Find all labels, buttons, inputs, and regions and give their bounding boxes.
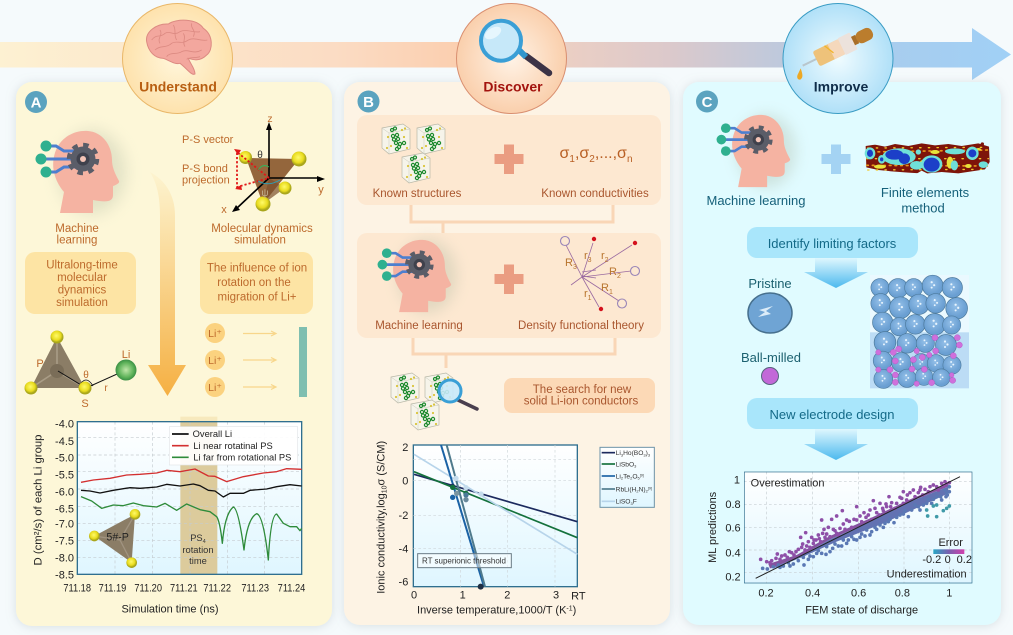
chart: diffusion coefficient vs time (32, 417, 305, 615)
callout: search: solid Li-ion conductors (524, 396, 638, 408)
density functional diagram: r (584, 288, 588, 300)
legend: LiSbO (616, 461, 634, 468)
chart: diffusion coefficient vs time: -6.0 (55, 486, 74, 498)
chart: diffusion coefficient vs time: -8.0 (55, 552, 74, 564)
icon: machine learning head (378, 239, 457, 313)
chart: ML predictions vs FEM: 0.2 (725, 572, 741, 584)
chart: ML predictions vs FEM: 0.8 (725, 499, 741, 511)
legend: 5 (638, 476, 641, 481)
chart: diffusion coefficient vs time: 711.21 (170, 582, 198, 594)
tetrahedron with Li: P (36, 358, 44, 370)
chart: diffusion coefficient vs time: -8.5 (55, 570, 74, 582)
icon: machine learning head (36, 130, 126, 214)
legend: RbLi(H (616, 486, 636, 493)
chart: ML predictions vs FEM: Underestimation (887, 568, 967, 580)
chart: diffusion coefficient vs time: Simulation time (ns) (121, 603, 219, 615)
density functional diagram: r (601, 250, 605, 262)
sigma series: n (627, 154, 632, 165)
label: RT superionic threshold: RT superionic threshold (422, 556, 506, 565)
label: known conductivities: Known conductivities (541, 188, 649, 200)
callout: ion rotation: migration of Li+ (218, 292, 297, 304)
legend: [9] (640, 473, 644, 477)
legend (600, 447, 654, 507)
sigma series: ,σ (575, 145, 589, 162)
chart: ionic conductivity: 10 (382, 485, 389, 493)
sigma series: 1 (569, 154, 575, 165)
chart: ML predictions vs FEM: FEM state of discharge (805, 604, 918, 616)
legend: Li (616, 473, 621, 480)
chart: ML predictions vs FEM: 1 (734, 474, 740, 486)
ball-milled particle (762, 368, 778, 384)
chart: ML predictions vs FEM: ML predictions (707, 491, 719, 563)
chart: diffusion coefficient vs time: 711.22 (203, 582, 231, 594)
arrow: down (804, 258, 868, 288)
label: machine learning: Machine learning (706, 193, 806, 208)
error colour bar (933, 549, 964, 554)
chart: diffusion coefficient vs time: -7.5 (55, 536, 74, 548)
chart: ionic conductivity: Ionic conductivity,log (376, 493, 388, 594)
label: machine learning: Machine (55, 223, 99, 235)
finite elements heat map (865, 142, 990, 175)
label: machine learning: Machine learning (375, 320, 463, 332)
panel A background (16, 82, 332, 626)
connector lines (411, 205, 615, 368)
label: pristine: Pristine (748, 276, 792, 291)
label: RT superionic threshold (418, 554, 511, 568)
tetrahedron with Li (24, 330, 136, 410)
legend: Li near rotatinal PS (193, 441, 273, 451)
header badge: improve: Improve (814, 78, 868, 94)
legend: 2 (646, 489, 649, 494)
chart: diffusion coefficient vs time: -5.0 (55, 453, 74, 465)
badge C: C (702, 94, 713, 111)
icon: magnifier (481, 21, 549, 73)
chart: diffusion coefficient vs time: -7.0 (55, 519, 74, 531)
callout: ultralong-time (25, 252, 136, 314)
badge C (696, 90, 718, 112)
chart: diffusion coefficient vs time: -6.5 (55, 503, 74, 515)
chart: diffusion coefficient vs time: -4.0 (55, 419, 74, 431)
md axes diagram (182, 113, 325, 216)
chart: ML predictions vs FEM: Overestimation (751, 478, 825, 490)
chart: ML predictions vs FEM: 0.6 (725, 522, 741, 534)
chart: ionic conductivity: -4 (399, 543, 408, 555)
plus sign (494, 144, 524, 174)
label: PS4 rotation time: PS (190, 533, 206, 545)
chart: ionic conductivity: 2 (402, 442, 408, 454)
label: molecular dynamics simulation: Molecular dynamics (211, 223, 313, 235)
tetrahedron with Li: r (104, 383, 108, 394)
legend: 3 (634, 464, 637, 469)
label: machine learning: learning (57, 234, 97, 246)
chart: ionic conductivity (376, 441, 654, 617)
callout: ultralong-time: Ultralong-time (46, 260, 118, 272)
md axes diagram: θ (257, 150, 263, 161)
inset tetrahedron (89, 509, 140, 568)
progress arrow (0, 28, 1011, 80)
header badge: understand: Understand (139, 78, 217, 94)
icon: machine learning head (717, 114, 796, 188)
panel C: improve (683, 82, 1001, 625)
down arrow (148, 172, 186, 396)
chart: ML predictions vs FEM (707, 472, 972, 616)
chart: diffusion coefficient vs time: 711.18 (63, 582, 91, 594)
chart: ML predictions vs FEM: 0.2 (758, 587, 774, 599)
callout: ultralong-time: simulation (56, 297, 108, 309)
header badge: discover: Discover (483, 78, 543, 94)
callout: ultralong-time: molecular (57, 272, 107, 284)
callout: ion rotation (200, 252, 313, 314)
chart: ML predictions vs FEM: 1 (946, 587, 952, 599)
density functional diagram: r (584, 250, 588, 262)
md axes diagram: projection (182, 174, 230, 186)
arrow: down (804, 429, 868, 460)
legend: [9] (648, 486, 652, 490)
md axes diagram: P-S bond (182, 163, 228, 175)
sub-panel: known data (357, 115, 661, 205)
sigma series: ,...,σ (595, 145, 627, 162)
density functional diagram: 2 (617, 273, 621, 280)
chart: ionic conductivity: -6 (399, 577, 408, 589)
md axes diagram: y (318, 184, 324, 196)
chart: ionic conductivity: RT (571, 590, 586, 602)
chart: ionic conductivity: -2 (399, 510, 408, 522)
header badge: discover (456, 4, 566, 114)
label: finite elements method: method (901, 200, 945, 216)
badge A (25, 91, 47, 113)
chart: ionic conductivity: Inverse temperature,1000/T (K (417, 605, 566, 617)
density functional diagram (560, 236, 640, 311)
tetrahedron with Li: θ (83, 370, 89, 381)
legend: 3 (643, 452, 646, 457)
md axes diagram: ψ (261, 188, 269, 199)
sigma series: 2 (589, 154, 595, 165)
header badge: understand (122, 4, 232, 114)
legend: 3 (630, 501, 633, 506)
label: molecular dynamics simulation: simulation (234, 234, 286, 246)
density functional diagram: 1 (588, 295, 592, 302)
callout: search (504, 378, 655, 413)
chart: diffusion coefficient vs time: -4.5 (55, 436, 74, 448)
panel B: discover (344, 82, 670, 625)
density functional diagram: 2 (605, 257, 609, 264)
legend: 2 (621, 476, 624, 481)
button: identify limiting factors (747, 227, 918, 258)
Li+ migration: Li⁺ (208, 355, 222, 367)
legend: LiSO (616, 499, 630, 506)
label: known structures: Known structures (373, 188, 462, 200)
chart: diffusion coefficient vs time: 711.24 (278, 582, 305, 594)
chart: ML predictions vs FEM: 0.6 (851, 587, 866, 599)
chart: ionic conductivity: -1 (566, 605, 573, 612)
callout: ultralong-time: dynamics (58, 285, 107, 297)
chart: ionic conductivity: 0 (411, 589, 417, 601)
legend: Overall Li (193, 429, 232, 439)
chart: ionic conductivity: 0 (402, 475, 408, 487)
legend: O (632, 473, 638, 480)
callout: ion rotation: rotation on the (217, 277, 291, 289)
chart: ionic conductivity: ) (573, 605, 576, 617)
chart: ML predictions vs FEM: 0 (945, 554, 951, 566)
chart: diffusion coefficient vs time: 711.20 (134, 582, 162, 594)
density functional diagram: R (609, 266, 617, 278)
icon: dropper (797, 23, 876, 80)
panel C background (683, 82, 1001, 625)
panel B background (344, 82, 670, 625)
label: PS4 rotation time: rotation (182, 545, 214, 555)
md axes diagram: x (221, 204, 227, 216)
chart: ML predictions vs FEM: -0.2 (922, 554, 941, 566)
legend: F (633, 499, 637, 506)
icon: known crystal structures (382, 124, 445, 183)
legend: 3 (648, 452, 651, 457)
callout: search: The search for new (533, 384, 632, 396)
button: new electrode design (747, 398, 918, 429)
chart: ionic conductivity: 3 (553, 589, 559, 601)
chart: ML predictions vs FEM: 0.4 (725, 547, 741, 559)
chart: diffusion coefficient vs time: -5.5 (55, 470, 74, 482)
density functional diagram: 3 (588, 257, 592, 264)
Li+ migration: Li⁺ (208, 328, 222, 340)
chart: ML predictions vs FEM: Error (938, 537, 963, 549)
label: PS4 rotation time: 4 (203, 539, 206, 545)
legend: Li far from rotational PS (193, 453, 291, 463)
Li+ migration: Li⁺ (208, 382, 222, 394)
label: ball-milled: Ball-milled (741, 350, 801, 365)
tetrahedron with Li: S (81, 398, 89, 410)
pristine particle (748, 293, 792, 333)
density functional diagram: 1 (609, 289, 613, 296)
panel A: understand (16, 82, 332, 626)
inset tetrahedron: 5#-P (106, 532, 129, 544)
button: new electrode design: New electrode design (769, 407, 895, 422)
legend: Li (616, 450, 621, 457)
chart: ionic conductivity: 2 (504, 589, 510, 601)
legend: N) (639, 486, 646, 493)
label: PS4 rotation time: time (189, 556, 207, 566)
density functional diagram: R (565, 257, 573, 269)
callout: ion rotation: The influence of ion (207, 262, 307, 274)
chart: ML predictions vs FEM: 0.4 (805, 587, 820, 599)
legend (169, 427, 298, 465)
header badge: improve (783, 4, 893, 114)
legend: Ho(BO (623, 450, 643, 457)
label: finite elements method: Finite elements (881, 185, 970, 200)
chart: diffusion coefficient vs time: 711.19 (99, 582, 126, 594)
legend: 2 (630, 476, 633, 481)
electrode particles (870, 275, 969, 388)
density functional diagram: 3 (573, 264, 577, 271)
chart: ML predictions vs FEM: 0.2 (957, 554, 972, 566)
sigma series: σ (560, 145, 569, 162)
legend: Te (623, 473, 630, 480)
density functional diagram: R (601, 282, 609, 294)
md axes diagram: z (267, 113, 273, 125)
md axes diagram: P-S vector (182, 134, 234, 146)
sub-panel: methods (357, 233, 661, 338)
legend: 2 (636, 489, 639, 494)
chart: ionic conductivity: σ (S/CM) (376, 441, 388, 485)
plus sign (494, 264, 524, 294)
chart: diffusion coefficient vs time: D (cm²/s) of each Li group (32, 435, 44, 565)
tetrahedron with Li: Li (122, 349, 130, 361)
Li+ migration (205, 323, 307, 397)
label: density functional theory: Density functional theory (518, 320, 644, 332)
legend: 3 (621, 452, 624, 457)
button: identify limiting factors: Identify limiting factors (768, 236, 897, 251)
badge B (358, 90, 380, 112)
legend: ) (646, 450, 648, 457)
plus sign (822, 144, 850, 174)
chart: diffusion coefficient vs time: 711.23 (241, 582, 269, 594)
chart: ML predictions vs FEM: 0.8 (895, 587, 910, 599)
icon: new structures search (391, 373, 477, 430)
icon: brain (147, 20, 211, 74)
badge A: A (31, 94, 42, 112)
chart: ionic conductivity: 1 (460, 589, 466, 601)
badge B: B (363, 94, 374, 111)
